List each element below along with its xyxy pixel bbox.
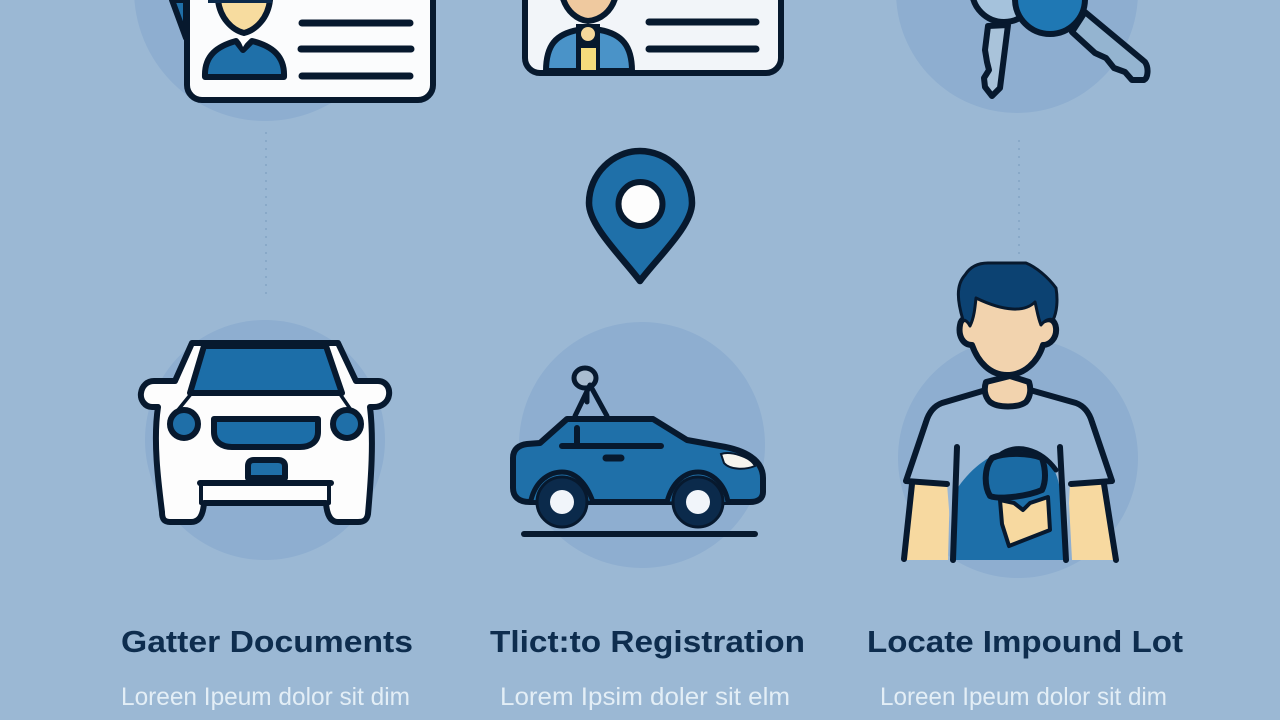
step 2 title: Tlict:to Registration: [490, 624, 805, 659]
step 3 title: Locate Impound Lot: [867, 624, 1183, 659]
icon: car front view: [141, 320, 389, 560]
icon: driver licence card with person: [134, 0, 433, 121]
step 2 description: Lorem Ipsim doler sit elm: [500, 683, 790, 711]
icon: registration card with person and tie: [525, 0, 781, 73]
icon: car side view with key: [513, 322, 765, 568]
step 1 description: Loreen Ipeum dolor sit dim: [121, 683, 410, 711]
icon: car keys: [896, 0, 1148, 113]
icon: map pin: [589, 151, 692, 281]
step 1 title: Gatter Documents: [121, 624, 413, 659]
step 3 description: Loreen Ipeum dolor sit dim: [880, 683, 1167, 711]
icon: person holding bag: [898, 263, 1138, 578]
